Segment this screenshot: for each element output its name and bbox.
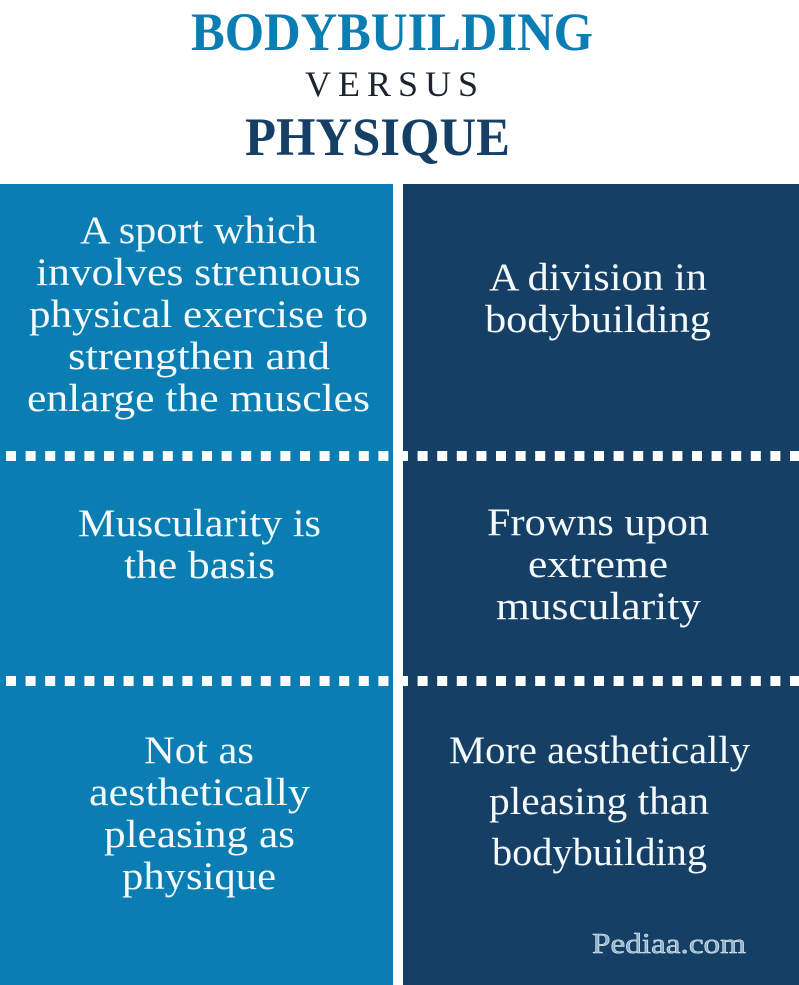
divider: dotted row 1 [6, 451, 799, 461]
text: physique definition: bodybuilding [485, 298, 711, 341]
text: bodybuilding muscularity: Muscularity is [78, 502, 321, 545]
text: bodybuilding definition: strengthen and [68, 335, 331, 378]
text: physique aesthetics [449, 729, 751, 874]
title: physique: PHYSIQUE [245, 107, 510, 167]
title block [191, 2, 593, 167]
text: physique muscularity [487, 501, 709, 628]
title: bodybuilding: BODYBUILDING [191, 2, 593, 62]
text: physique muscularity: muscularity [496, 585, 702, 628]
text: physique muscularity: extreme [528, 543, 668, 586]
text: physique aesthetics: bodybuilding [492, 831, 707, 874]
text: bodybuilding aesthetics: pleasing as [104, 813, 295, 856]
text: physique definition [485, 256, 711, 341]
logo: Pediaa.com: Pediaa.com [592, 928, 747, 960]
text: physique muscularity: Frowns upon [487, 501, 709, 544]
panel: physique column [403, 184, 799, 985]
text: bodybuilding aesthetics: Not as [144, 729, 254, 772]
text: bodybuilding aesthetics: aesthetically [89, 771, 311, 814]
title: versus: VERSUS [305, 64, 478, 104]
text: bodybuilding definition: physical exercise to [29, 293, 368, 336]
text: physique aesthetics: pleasing than [489, 780, 709, 823]
divider: dotted row 2 [6, 676, 799, 686]
text: bodybuilding aesthetics: physique [122, 855, 276, 898]
text: bodybuilding definition: involves strenuous [36, 251, 361, 294]
text: bodybuilding definition: A sport which [80, 209, 317, 252]
text: physique aesthetics: More aesthetically [449, 729, 751, 772]
text: physique definition: A division in [489, 256, 707, 299]
text: bodybuilding definition [27, 209, 370, 420]
panel: bodybuilding column [0, 184, 393, 985]
text: bodybuilding muscularity [78, 502, 321, 587]
text: bodybuilding muscularity: the basis [124, 544, 275, 587]
text: bodybuilding definition: enlarge the muscles [27, 377, 370, 420]
text: bodybuilding aesthetics [89, 729, 311, 898]
